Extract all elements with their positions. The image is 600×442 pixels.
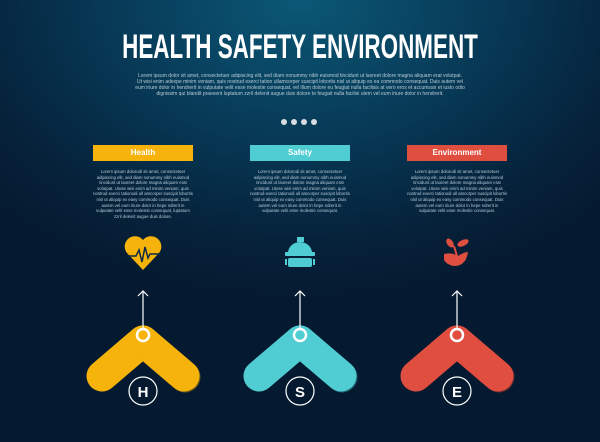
header: Safety	[250, 145, 350, 161]
header: Safety: Safety	[288, 148, 312, 157]
header: Environment: Environment	[433, 148, 481, 157]
group: Health chevron	[102, 291, 185, 405]
icon: helmet	[285, 237, 315, 267]
group: Safety chevron: S	[295, 384, 305, 401]
group: Health chevron: H	[138, 384, 148, 401]
header: Environment	[407, 145, 507, 161]
subtitle text: Lorem ipsum dolor sit amet, consectetuer adipiscing elit, sed diam nonummy nibh euismod tincidunt ut laoreet dolore magna aliquam erat volutpat. Ut wisi enim adexpe minim veniam, quis nostrud exerci tation ullamcorper suscipit lobortis nisl ut aliquip ex ea commodo consequat. Duis autem vel eum iriure dolor in hendrerit in vulputate velit esse molestie consequat, vel illum dolore eu feugiat nulla facilisis at vero eros et accumsan et iusto odio dignissim qui blandit praesent luptatum zzril delenit augue duis dolore te feugait nulla facilisi utem vel eum iriure dolor in hendrerit.	[135, 73, 465, 97]
text: Health: Lorem ipsum dolorodi sit amet, consectetuer adipiscing elit, sed diam nonummy nibh euismod tincidunt ut laoreet dolore magna aliquam erat volutpat. Utose wisi enim ad minim veniam, quis nostrud exerci tationodi ull amcorper suscipit lobortis nisl ut aliquip ex easy commodo consequat. Duis autem vel eum iriure dolor in hepe ndrerit in vulputate velit esse molestie consequat, luptatum zzril delenit augue duis dolore.	[93, 169, 193, 219]
dots	[281, 119, 317, 125]
group: Safety chevron	[259, 291, 342, 405]
group: Environment chevron	[416, 291, 499, 405]
text: Safety: Lorem ipsum dolorodi sit amet, consectetuer adipiscing elit, sed diam nonummy nibh euismod tincidunt ut laoreet dolore magna aliquam erat volutpat. Utose wisi enim ad minim veniam, quis nostrud exerci tationodi ull amcorper suscipit lobortis nisl ut aliquip ex easy commodo consequat. Duis autem vel eum iriure dolor in hepe ndrerit in vulputate velit esse molestie consequat.	[250, 169, 350, 213]
icon: heart	[125, 236, 161, 270]
icon: plant in hand	[444, 237, 470, 266]
group: Environment chevron: E	[452, 384, 462, 401]
text: Environment: Lorem ipsum dolorodi sit amet, consectetuer adipiscing elit, sed diam nonummy nibh euismod tincidunt ut laoreet dolore magna aliquam erat volutpat. Utose wisi enim ad minim veniam, quis nostrud exerci tationodi ull amcorper suscipit lobortis nisl ut aliquip ex easy commodo consequat. Duis autem vel eum iriure dolor in hepe ndrerit in vulputate velit esse molestie consequat.	[407, 169, 507, 213]
header: Health: Health	[131, 148, 155, 157]
title: HEALTH SAFETY ENVIRONMENT	[122, 28, 478, 66]
header: Health	[93, 145, 193, 161]
